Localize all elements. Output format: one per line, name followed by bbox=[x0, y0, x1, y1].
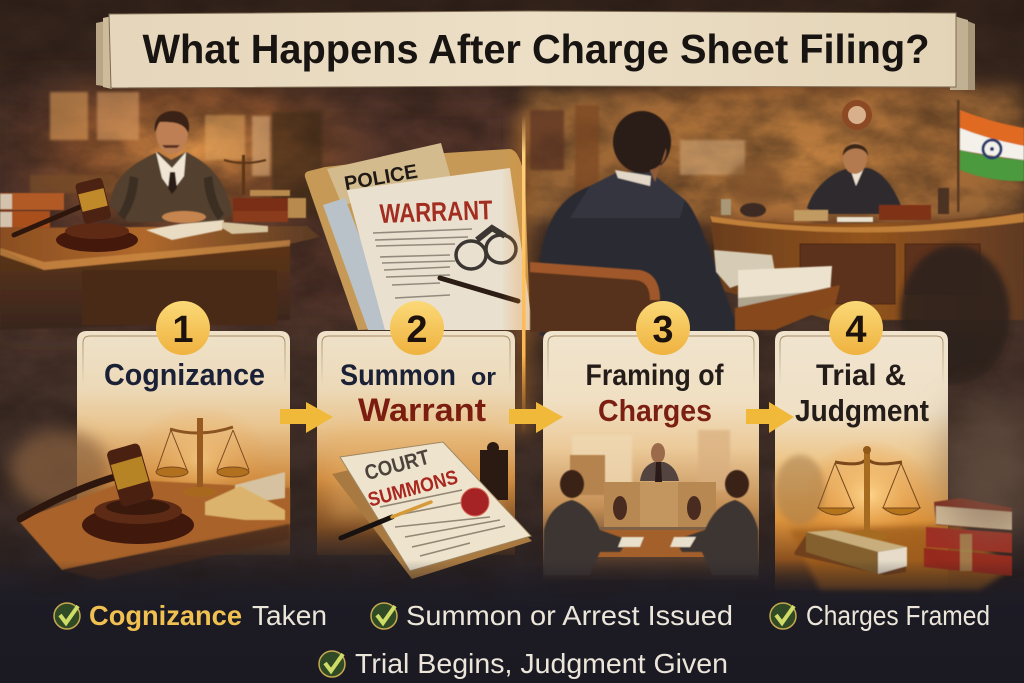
panel: trial and judgment bbox=[775, 331, 1012, 590]
pen bbox=[440, 278, 518, 301]
right courtroom background bbox=[530, 100, 872, 209]
panel: trial and judgment: Judgment bbox=[795, 393, 929, 428]
check item: trial and judgment: Trial Begins, Judgment Given bbox=[355, 648, 728, 679]
court summons document bbox=[332, 442, 532, 579]
gavel on left desk bbox=[14, 177, 138, 252]
banner bbox=[96, 11, 975, 90]
left courtroom background bbox=[30, 92, 322, 217]
step badge 4 bbox=[829, 301, 883, 355]
check item: charges framed: Charges Framed bbox=[806, 600, 990, 631]
indian flag bbox=[957, 100, 1024, 212]
heading: or bbox=[471, 364, 496, 391]
heading: Framing of bbox=[586, 359, 724, 392]
presiding officer bbox=[640, 443, 679, 482]
court summons document: SUMMONS bbox=[366, 466, 460, 512]
check item: summon or arrest: Summon or Arrest Issued bbox=[406, 600, 733, 631]
scales and books on left desk bbox=[146, 155, 306, 240]
stacked red books bbox=[924, 498, 1012, 576]
presiding judge bbox=[721, 142, 949, 222]
step badge 2 bbox=[390, 301, 444, 355]
police label: POLICE bbox=[343, 161, 419, 195]
books bbox=[235, 472, 285, 505]
seated clerks bbox=[600, 527, 710, 539]
step badge 3: 3 bbox=[652, 309, 674, 351]
bottom fade bbox=[0, 560, 1024, 683]
panel: summon or warrant: Warrant bbox=[358, 392, 486, 428]
heading: Trial & bbox=[816, 359, 906, 392]
arrow 1 to 2 bbox=[280, 402, 333, 433]
panel: framing of charges: Charges bbox=[598, 393, 712, 428]
pen bbox=[341, 517, 392, 538]
left desk bbox=[0, 226, 320, 330]
bench bbox=[604, 482, 716, 528]
vertical light beam bbox=[512, 115, 534, 435]
panel: cognizance bbox=[10, 331, 290, 580]
right bench bbox=[710, 212, 1024, 320]
handcuffs bbox=[456, 228, 516, 269]
check item: cognizance taken: Cognizance bbox=[89, 600, 242, 631]
check item: cognizance taken: Taken bbox=[252, 600, 327, 631]
table bbox=[790, 525, 1010, 590]
desk bbox=[18, 480, 290, 570]
step badge 1: 1 bbox=[172, 309, 194, 351]
seal bbox=[461, 488, 489, 516]
table bbox=[585, 530, 725, 557]
court emblem bbox=[842, 100, 872, 130]
right advocate bbox=[670, 470, 758, 575]
step badge 4: 4 bbox=[845, 309, 867, 351]
left books bbox=[0, 193, 64, 228]
warrant folder bbox=[305, 143, 535, 330]
courtroom bbox=[572, 435, 632, 485]
panel: framing of charges bbox=[543, 331, 759, 580]
heading: Cognizance bbox=[104, 357, 265, 392]
dark audience silhouette bbox=[900, 245, 1010, 385]
gavel bbox=[20, 442, 194, 544]
step badge 1 bbox=[156, 301, 210, 355]
right edge smoke bbox=[940, 400, 1024, 540]
check item: cognizance taken bbox=[54, 600, 327, 631]
back view advocate bbox=[538, 111, 735, 335]
warrant heading: WARRANT bbox=[379, 195, 493, 229]
law book bbox=[794, 530, 907, 575]
arrow 3 to 4 bbox=[746, 402, 794, 433]
scales bbox=[156, 418, 249, 497]
step badge 3 bbox=[636, 301, 690, 355]
panel: summon or warrant bbox=[317, 331, 532, 579]
judge at left desk bbox=[110, 111, 232, 223]
court summons document: COURT bbox=[362, 446, 432, 485]
checklist bbox=[54, 600, 990, 679]
chair and document stacks bbox=[530, 250, 840, 332]
left advocate bbox=[544, 470, 644, 575]
arrow 2 to 3 bbox=[509, 402, 563, 433]
step badge 2: 2 bbox=[406, 309, 428, 351]
heading: Summon bbox=[340, 359, 456, 392]
stamp bbox=[480, 442, 508, 500]
scales bbox=[818, 446, 920, 542]
title: What Happens After Charge Sheet Filing? bbox=[142, 26, 930, 72]
